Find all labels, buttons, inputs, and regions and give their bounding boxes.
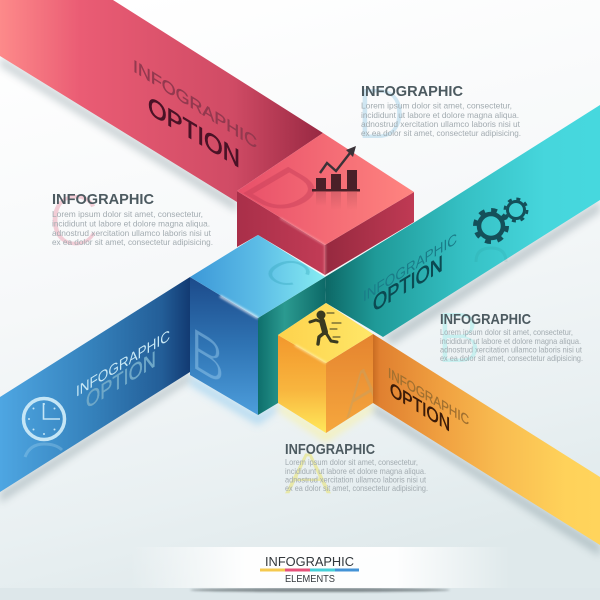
text block: C: [48, 179, 213, 262]
orange band label: OPTION: [390, 378, 450, 436]
panel: blue band: [0, 277, 190, 492]
icon: running man: [310, 310, 341, 344]
letter D on red cube: D: [222, 155, 344, 227]
orange band label: INFOGRAPHIC: [388, 365, 469, 429]
cube glows: [190, 375, 373, 442]
watermark letter D: D: [356, 72, 406, 155]
icon: growth chart: [312, 146, 360, 192]
text block: C: INFOGRAPHIC: [52, 191, 154, 208]
footer title: INFOGRAPHIC: [265, 554, 354, 569]
teal band label: OPTION: [373, 251, 443, 318]
text block: A: Lorem ipsum dolor sit amet, consectetur,: [285, 457, 418, 467]
panel: red cube: [222, 133, 414, 275]
panel: orange band: [373, 334, 600, 545]
text block: D: ex ea dolor sit amet, consectetur adipisicing.: [361, 128, 521, 138]
cube edge highlight: [280, 218, 325, 275]
text block: A: incididunt ut labore et dolore magna aliqua.: [285, 466, 426, 476]
text block: D: INFOGRAPHIC: [361, 83, 463, 100]
panel: teal band: [325, 105, 600, 337]
text block: C: adnostrud xercitation ullamco laboris nisi ut: [52, 228, 212, 238]
text block: B: adnostrud xercitation ullamco laboris nisi ut: [440, 344, 583, 354]
text block: C: ex ea dolor sit amet, consectetur adipisicing.: [52, 237, 213, 247]
chart reflection: [316, 192, 357, 210]
panel: red band: [0, 0, 323, 202]
text block: D: Lorem ipsum dolor sit amet, consectetur,: [361, 100, 512, 110]
watermark letter C: C: [48, 179, 100, 262]
cube edge highlight: [295, 345, 326, 363]
icon: gears: [475, 199, 527, 242]
blue band label: OPTION: [86, 346, 156, 414]
footer banner: [0, 547, 600, 600]
blue band label: INFOGRAPHIC: [76, 327, 170, 401]
panel: blue cube: [190, 235, 327, 415]
icon: clock: [24, 398, 64, 440]
letter C on blue cube: C: [249, 250, 327, 296]
cube edge highlight: [220, 296, 258, 318]
text block: A: [283, 440, 428, 507]
text block: A: adnostrud xercitation ullamco laboris nisi ut: [285, 474, 427, 484]
text block: B: ex ea dolor sit amet, consectetur adipisicing.: [440, 353, 583, 363]
footer colour bar: [260, 568, 359, 572]
red band label: OPTION: [148, 90, 240, 174]
gears reflection: [476, 248, 506, 262]
watermark letter B: B: [436, 296, 482, 379]
text block: B: INFOGRAPHIC: [440, 311, 531, 328]
text block: A: INFOGRAPHIC: [285, 441, 375, 458]
red band label: INFOGRAPHIC: [133, 55, 257, 153]
text block: A: ex ea dolor sit amet, consectetur adipisicing.: [285, 483, 428, 493]
text block: C: Lorem ipsum dolor sit amet, consectetur,: [52, 209, 203, 219]
text block: D: incididunt ut labore et dolore magna aliqua.: [361, 110, 519, 120]
text block: B: incididunt ut labore et dolore magna aliqua.: [440, 336, 581, 346]
watermark letter A: A: [283, 440, 333, 507]
letter B on blue cube: B: [190, 314, 225, 400]
text block: C: incididunt ut labore et dolore magna aliqua.: [52, 218, 210, 228]
letter A on yellow cube: A: [345, 348, 379, 433]
footer subtitle: ELEMENTS: [285, 574, 335, 585]
text block: D: [356, 72, 521, 155]
teal band label: INFOGRAPHIC: [363, 230, 457, 306]
text block: B: Lorem ipsum dolor sit amet, consectetur,: [440, 327, 573, 337]
panel: yellow cube: [278, 303, 379, 433]
clock reflection: [25, 444, 62, 457]
text block: B: [436, 296, 583, 379]
text block: D: adnostrud xercitation ullamco laboris nisi ut: [361, 119, 521, 129]
